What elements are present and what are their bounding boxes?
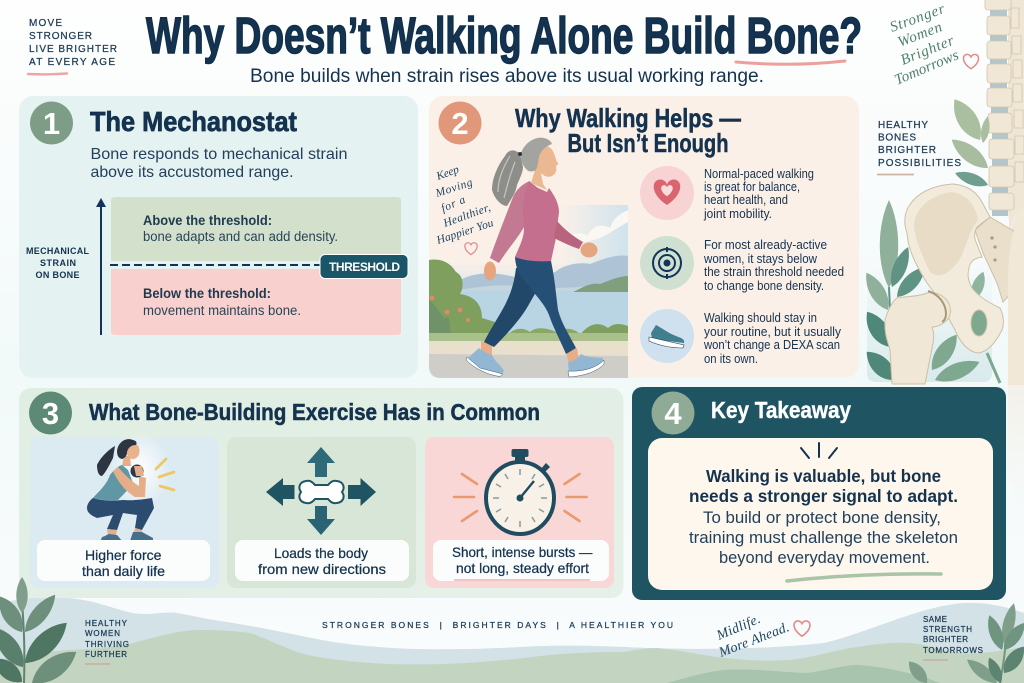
badge 1: 1 bbox=[43, 106, 60, 141]
threshold badge bbox=[320, 254, 408, 278]
text: below the threshold: to change bone density. bbox=[704, 279, 824, 293]
label: from new directions bbox=[258, 561, 386, 577]
text: below the threshold: For most already-active bbox=[704, 238, 827, 252]
tagline: healthy bones bbox=[877, 120, 961, 174]
illustration: woman squatting with kettlebell bbox=[87, 432, 174, 545]
zone: above the threshold: bone adapts and can add density. bbox=[143, 229, 338, 244]
icon: heart top right bbox=[963, 54, 979, 69]
handwritten note: keep moving: for a bbox=[439, 194, 467, 215]
strain axis label: STRAIN bbox=[40, 258, 76, 268]
handwritten note: keep moving bbox=[433, 164, 495, 247]
handwritten note: stronger women: Brighter bbox=[899, 33, 957, 69]
heading: the mechanostat: The Mechanostat bbox=[90, 106, 297, 137]
text: keep walking: on its own. bbox=[704, 352, 758, 366]
description: above its accustomed range. bbox=[90, 164, 294, 181]
handwritten note: midlife: Midlife. bbox=[714, 612, 763, 644]
text: walking benefits: is great for balance, bbox=[704, 180, 800, 194]
text: keep walking: won’t change a DEXA scan bbox=[703, 338, 840, 352]
zone: below the threshold bbox=[111, 269, 401, 335]
label: Loads the body bbox=[274, 545, 368, 561]
card: new directions bbox=[227, 437, 416, 588]
badge 2 bbox=[438, 102, 482, 144]
footer tagline: healthy women: THRIVING bbox=[85, 640, 129, 649]
heading: key takeaway: Key Takeaway bbox=[711, 397, 851, 423]
icon: target circle bbox=[640, 236, 694, 290]
leaves bottom right bbox=[904, 602, 1024, 683]
handwritten note: stronger women: Stronger bbox=[888, 1, 947, 36]
takeaway card bbox=[648, 438, 993, 590]
zone: above the threshold: Above the threshold: bbox=[143, 213, 272, 228]
handwritten note: stronger women: Tomorrows bbox=[892, 47, 961, 89]
takeaway card: beyond everyday movement. bbox=[719, 548, 930, 567]
footer tagline: healthy women: FURTHER bbox=[85, 650, 127, 659]
label: Higher force bbox=[85, 547, 162, 563]
footer tagline: healthy women bbox=[85, 619, 129, 664]
footer tagline: same strength: BRIGHTER bbox=[923, 635, 968, 644]
heading: why walking helps: But Isn’t Enough bbox=[568, 128, 728, 158]
tagline: healthy bones: BONES bbox=[878, 132, 916, 144]
handwritten note: stronger women bbox=[888, 1, 961, 89]
footer tagline: healthy women: HEALTHY bbox=[85, 619, 128, 628]
label: than daily life bbox=[82, 563, 165, 579]
panel 2: why walking helps bbox=[429, 96, 859, 378]
badge 3: 3 bbox=[42, 396, 59, 431]
right decoration: pelvis and femur bones bbox=[885, 184, 1024, 385]
right decoration: spine bbox=[985, 0, 1024, 520]
icon: heart footer bbox=[794, 621, 810, 636]
panel 4: key takeaway bbox=[632, 387, 1006, 600]
text: walking benefits bbox=[703, 167, 814, 221]
text: below the threshold: women, it stays below bbox=[703, 252, 818, 266]
right decoration: leaves bbox=[860, 94, 1000, 387]
heading: why walking helps: Why Walking Helps — bbox=[515, 103, 741, 133]
footer tagline: same strength: TOMORROWS bbox=[923, 646, 983, 655]
label: not long, steady effort bbox=[456, 560, 589, 576]
tagline: healthy bones: HEALTHY bbox=[878, 120, 928, 131]
text: walking benefits: Normal-paced walking bbox=[704, 167, 814, 181]
label bbox=[37, 540, 210, 581]
tagline: healthy bones: POSSIBILITIES bbox=[878, 158, 961, 169]
badge 4 bbox=[652, 392, 694, 434]
icon: small heart bbox=[465, 243, 477, 255]
subtitle: Bone builds when strain rises above its usual working range. bbox=[250, 66, 764, 87]
label bbox=[235, 540, 409, 581]
label bbox=[433, 540, 609, 581]
icon: bone with four arrows bbox=[266, 447, 376, 535]
zone: below the threshold: Below the threshold: bbox=[143, 286, 271, 301]
panel 1: the mechanostat bbox=[19, 96, 418, 378]
footer tagline: healthy women: WOMEN bbox=[85, 629, 120, 638]
top-left tagline: LIVE BRIGHTER bbox=[29, 44, 117, 55]
arrow: strain axis bbox=[96, 198, 106, 335]
handwritten note: stronger women: Women bbox=[896, 19, 944, 51]
text: keep walking: Walking should stay in bbox=[704, 311, 817, 325]
zone: above the threshold bbox=[111, 197, 401, 261]
top-left tagline: STRONGER bbox=[29, 31, 92, 42]
tagline: healthy bones: BRIGHTER bbox=[878, 145, 936, 156]
description: Bone responds to mechanical strain bbox=[90, 146, 348, 163]
footer slogan: STRONGER BONES | BRIGHTER DAYS | A HEALTHIER YOU bbox=[322, 620, 673, 630]
takeaway card: To build or protect bone density, bbox=[703, 508, 941, 527]
icon: shoe circle bbox=[640, 309, 694, 363]
threshold badge: THRESHOLD bbox=[329, 260, 400, 274]
description bbox=[90, 146, 348, 181]
handwritten note: keep moving: Healthier, bbox=[441, 202, 492, 230]
handwritten note: keep moving: Moving bbox=[433, 177, 474, 200]
heading: why walking helps bbox=[515, 103, 741, 158]
heading: what bone-building exercise has in common: What Bone-Building Exercise Has in Common bbox=[89, 399, 540, 425]
strain axis label bbox=[26, 246, 90, 280]
badge 3 bbox=[29, 392, 72, 434]
badge 4: 4 bbox=[664, 396, 682, 431]
text: walking benefits: joint mobility. bbox=[703, 207, 772, 221]
illustration: woman walking bbox=[466, 138, 604, 377]
text: keep walking: your routine, but it usually bbox=[704, 325, 842, 339]
background hills bbox=[0, 598, 1024, 683]
takeaway card: training must challenge the skeleton bbox=[689, 528, 958, 547]
handwritten note: midlife: More Ahead. bbox=[716, 620, 792, 661]
icon: stopwatch bbox=[454, 449, 586, 534]
strain axis label: MECHANICAL bbox=[26, 246, 90, 256]
handwritten note: keep moving: Keep bbox=[434, 164, 461, 183]
badge 2: 2 bbox=[451, 106, 469, 141]
footer tagline: same strength: STRENGTH bbox=[923, 625, 972, 634]
takeaway card: Walking is valuable, but bone bbox=[706, 466, 941, 486]
text: below the threshold: the strain threshold needed bbox=[704, 265, 844, 279]
takeaway card: needs a stronger signal to adapt. bbox=[689, 486, 958, 506]
top-left tagline bbox=[28, 18, 117, 74]
card: higher force bbox=[30, 432, 219, 588]
card: short bursts bbox=[425, 437, 614, 588]
footer tagline: same strength: SAME bbox=[923, 615, 947, 624]
text: keep walking bbox=[703, 311, 842, 366]
strain axis label: ON BONE bbox=[36, 270, 80, 280]
label: Short, intense bursts — bbox=[452, 544, 592, 560]
panel 3: bone-building exercise bbox=[19, 388, 624, 598]
handwritten note: keep moving: Happier You bbox=[434, 217, 495, 247]
footer tagline: same strength bbox=[923, 615, 983, 660]
text: below the threshold bbox=[703, 238, 844, 293]
icon: heart circle bbox=[640, 166, 694, 220]
badge 1 bbox=[30, 102, 73, 144]
text: walking benefits: heart health, and bbox=[704, 193, 788, 207]
illustration: lakeside scene bbox=[429, 205, 628, 378]
top-left tagline: AT EVERY AGE bbox=[29, 57, 115, 68]
top-left tagline: MOVE bbox=[29, 18, 62, 29]
leaves bottom left bbox=[0, 577, 82, 683]
zone: below the threshold: movement maintains bone. bbox=[143, 303, 301, 318]
